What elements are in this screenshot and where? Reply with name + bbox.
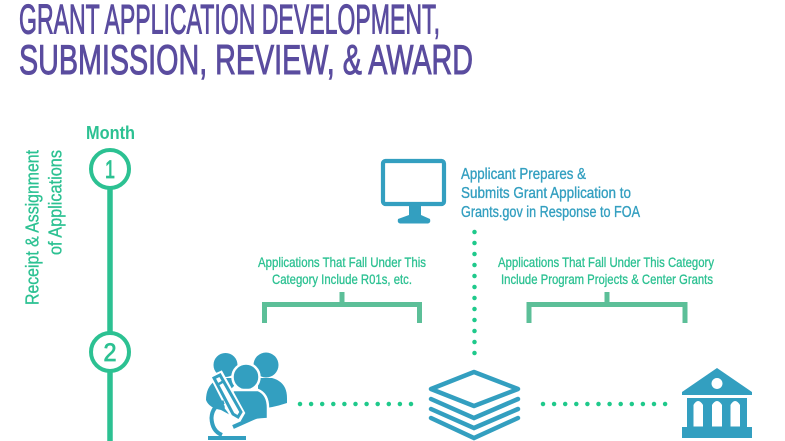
month 1 marker [91,150,129,188]
vertical dotted connector [472,232,477,354]
right category label [498,254,714,287]
text: applicant prepares [461,166,640,221]
month timeline [86,123,135,441]
right dotted connector [543,402,666,406]
microscope [208,402,260,438]
left category label: Category Include R01s, etc. [272,271,412,287]
text: applicant prepares: Applicant Prepares & [461,166,586,183]
right category label: Applications That Fall Under This Category [498,254,714,270]
right bracket [529,292,685,323]
month 2 marker: 2 [104,339,116,367]
icon: institution building [682,368,752,438]
phase label: receipt and assignment: Receipt & Assignment [22,150,42,305]
right category label: Include Program Projects & Center Grants [501,271,713,287]
left category label: Applications That Fall Under This [258,254,426,270]
icon: computer monitor [383,161,444,224]
text: applicant prepares: Grants.gov in Response to FOA [461,204,640,221]
timeline line [107,188,113,441]
phase label: receipt and assignment [22,150,66,305]
phase label: receipt and assignment: of Applications [46,150,66,255]
month 1 marker: 1 [105,156,115,184]
month 2 marker [91,333,129,371]
month heading: Month [86,123,135,143]
title [19,0,473,83]
centre person [226,364,268,423]
pencil [212,373,243,420]
left dotted connector [300,402,412,406]
left person [206,353,240,416]
text: applicant prepares: Submits Grant Application to [461,185,631,202]
icon: stack of layers [431,372,518,438]
left bracket [264,292,420,323]
title: SUBMISSION, REVIEW, & AWARD [19,36,473,83]
right person [254,352,287,409]
icon: researchers with microscope and pencil [206,352,287,438]
left category label [258,254,426,287]
